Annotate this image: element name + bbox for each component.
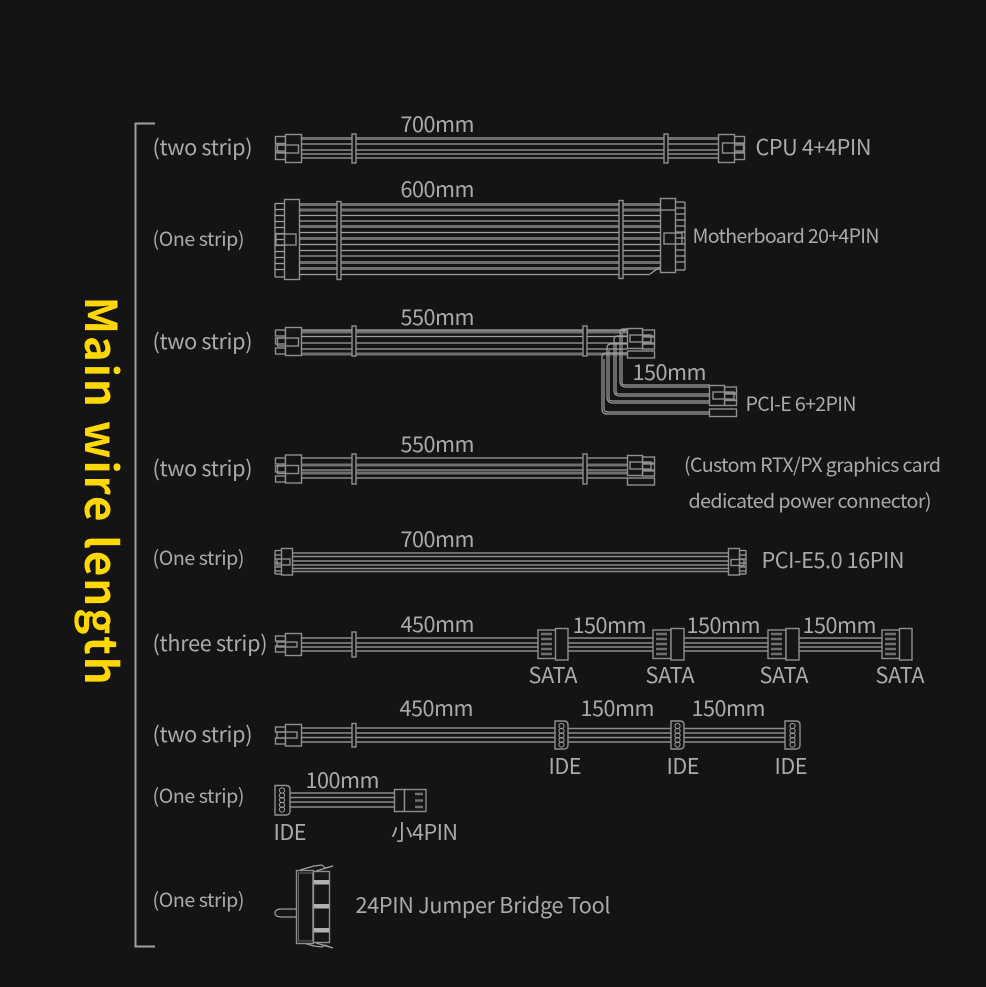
- length labels: 450mm: [400, 608, 474, 639]
- row: Motherboard 20+4PIN: [152, 173, 880, 280]
- branch length label: 150mm: [632, 356, 706, 387]
- row: PCI-E 6+2PIN: [152, 301, 856, 417]
- left connector: [276, 328, 302, 356]
- connector label: PCI-E5.0 16PIN: [762, 544, 904, 575]
- left connector: [276, 455, 302, 483]
- IDE labels: IDE: [548, 750, 582, 781]
- SATA labels: SATA: [528, 659, 578, 690]
- labels: 小4PIN: [391, 816, 458, 847]
- cable ties: [337, 200, 623, 280]
- right connector: [728, 548, 746, 575]
- IDE connector 1: [555, 721, 568, 749]
- row: PCI-E5.0 16PIN: [152, 523, 904, 575]
- left connector: [276, 134, 302, 162]
- left connector: [276, 724, 302, 746]
- length labels: 150mm: [802, 609, 876, 640]
- connector label: (Custom RTX/PX graphics card: [684, 449, 941, 478]
- IDE connector 2: [671, 721, 684, 749]
- title: Main wire length: [72, 296, 136, 687]
- branch wires: [602, 329, 710, 414]
- row: SATA cable: [152, 608, 925, 690]
- labels: IDE: [274, 816, 306, 847]
- SATA labels: SATA: [760, 659, 809, 690]
- SATA connector 3: [768, 628, 799, 660]
- SATA labels: SATA: [876, 659, 925, 690]
- right connector: [628, 456, 654, 485]
- strip label: (two strip): [152, 718, 252, 749]
- length label: 550mm: [400, 301, 474, 332]
- length labels: 150mm: [692, 692, 766, 723]
- length labels: 150mm: [572, 609, 646, 640]
- row: custom RTX/PX connector: [152, 428, 941, 514]
- cable ties: [352, 326, 587, 356]
- strip label: (One strip): [152, 542, 244, 571]
- length labels: 150mm: [580, 692, 654, 723]
- cable tie: [352, 632, 356, 657]
- cable wires: [292, 553, 729, 572]
- cable wires: [301, 728, 785, 742]
- cable wires: [299, 204, 660, 268]
- right connector branch: [710, 386, 736, 416]
- connector label: [684, 449, 941, 514]
- cable ties: [352, 454, 587, 484]
- left connector: [275, 548, 292, 575]
- SATA connector 1: [538, 628, 568, 660]
- SATA labels: [528, 659, 925, 690]
- connector label: Motherboard 20+4PIN: [692, 220, 880, 249]
- length label: 700mm: [400, 523, 474, 554]
- length labels: 150mm: [686, 609, 760, 640]
- SATA connector 2: [653, 628, 684, 660]
- left connector: [275, 200, 300, 280]
- 4PIN connector: [394, 790, 426, 812]
- length label: 600mm: [400, 173, 474, 204]
- strip label: (One strip): [152, 223, 244, 252]
- connector label: PCI-E 6+2PIN: [746, 388, 856, 417]
- cable wires: [301, 638, 882, 651]
- bracket: [136, 124, 155, 946]
- row: small 4PIN adapter: [152, 764, 458, 847]
- IDE connector 3: [785, 721, 800, 749]
- cable wires: [290, 793, 394, 807]
- labels: [274, 816, 458, 847]
- length label: 550mm: [400, 428, 474, 459]
- length label: 700mm: [400, 108, 474, 139]
- bridge tool icon: [275, 865, 333, 948]
- length label: 100mm: [306, 764, 380, 795]
- length labels: [400, 692, 766, 723]
- IDE labels: [548, 750, 808, 781]
- cable wires: [301, 332, 627, 354]
- connector label: CPU 4+4PIN: [756, 131, 872, 162]
- strip label: (three strip): [152, 627, 268, 658]
- right connector: [650, 198, 685, 274]
- row: CPU 4+4PIN: [152, 108, 872, 163]
- length labels: [400, 608, 876, 640]
- tool label: 24PIN Jumper Bridge Tool: [356, 889, 610, 920]
- cable ties: [352, 134, 668, 163]
- right connector top: [628, 328, 654, 358]
- row: jumper bridge tool: [152, 865, 610, 948]
- IDE labels: IDE: [774, 750, 808, 781]
- row: IDE cable: [152, 692, 808, 781]
- strip label: (two strip): [152, 452, 252, 483]
- connector label: dedicated power connector): [688, 485, 932, 514]
- SATA labels: SATA: [646, 659, 695, 690]
- strip label: (two strip): [152, 325, 252, 356]
- cable tie: [352, 724, 356, 747]
- cable wires: [301, 458, 627, 478]
- strip label: (One strip): [152, 884, 244, 913]
- SATA connector 4: [882, 628, 912, 660]
- left connector: [276, 634, 302, 656]
- cable wires: [301, 137, 718, 140]
- strip label: (One strip): [152, 780, 244, 809]
- length labels: 450mm: [400, 692, 474, 723]
- right connector: [718, 134, 744, 162]
- strip label: (two strip): [152, 131, 252, 162]
- IDE labels: IDE: [666, 750, 700, 781]
- IDE connector: [275, 786, 290, 815]
